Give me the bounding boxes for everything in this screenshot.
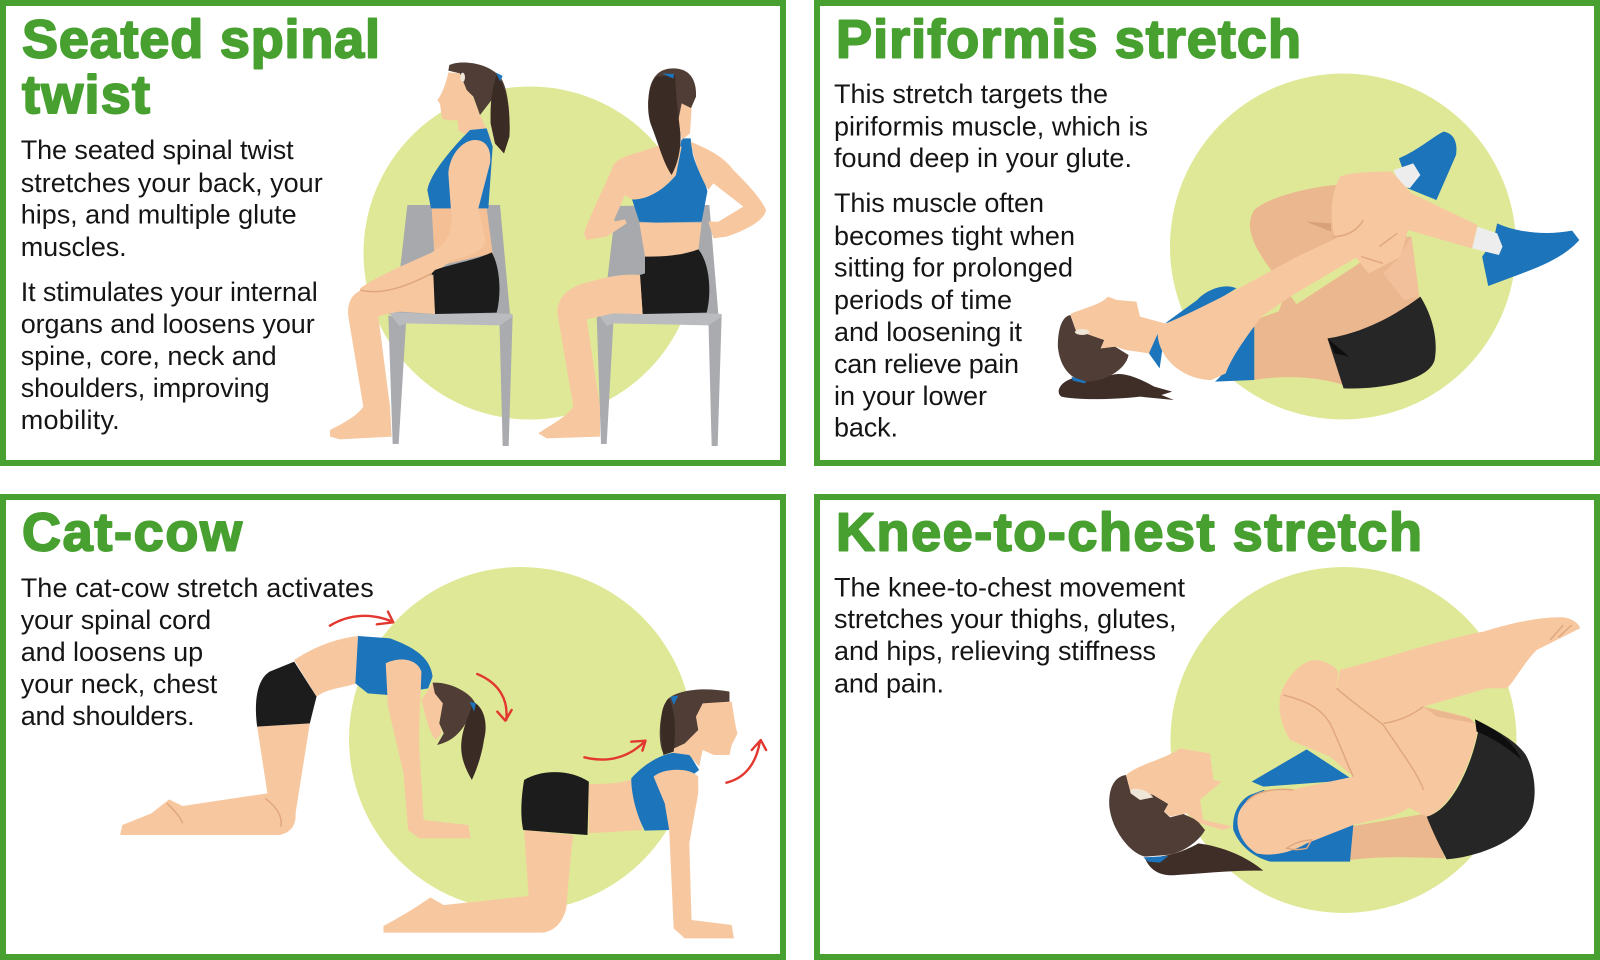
panel: cat-cow xyxy=(3,497,783,957)
text block: piriformis description: and loosening it xyxy=(834,317,1022,347)
text block: piriformis description: in your lower xyxy=(834,381,987,411)
text block: piriformis description: sitting for prolonged xyxy=(834,252,1073,282)
text block: piriformis description: periods of time xyxy=(834,285,1012,315)
panel: knee-to-chest stretch xyxy=(817,497,1597,957)
text block: piriformis description: can relieve pain xyxy=(834,349,1019,379)
text block: seated spinal twist description: It stimulates your internal xyxy=(21,277,318,307)
arrow: cat head xyxy=(477,674,512,721)
icon: background circle xyxy=(1170,567,1516,913)
text block: piriformis description: found deep in your glute. xyxy=(834,143,1132,173)
arrow: cat back xyxy=(330,612,393,626)
text block: seated spinal twist description: spine, core, neck and xyxy=(21,341,277,371)
text block: knee-to-chest description: stretches your thighs, glutes, xyxy=(834,604,1176,634)
heading: cat-cow: Cat-cow xyxy=(22,503,243,563)
illustration: woman seated back view twisting on chair xyxy=(538,68,766,446)
arrow: cow head xyxy=(726,740,766,783)
text block: knee-to-chest description xyxy=(834,573,1185,699)
text block: piriformis description: becomes tight when xyxy=(834,221,1075,251)
text block: seated spinal twist description: The seated spinal twist xyxy=(21,135,294,165)
text block: cat-cow description: and loosens up xyxy=(21,637,203,667)
panel: seated spinal twist xyxy=(3,3,783,463)
illustration: woman in cat pose xyxy=(120,636,486,838)
text block: piriformis description: back. xyxy=(834,412,898,442)
text block: seated spinal twist description: muscles. xyxy=(21,232,127,262)
text block: knee-to-chest description: The knee-to-chest movement xyxy=(834,573,1185,603)
icon: background circle xyxy=(349,567,693,911)
text block: seated spinal twist description: mobility. xyxy=(21,405,120,435)
text block: seated spinal twist description: stretches your back, your xyxy=(21,168,323,198)
panel: piriformis stretch xyxy=(817,3,1597,463)
text block: piriformis description: This stretch targets the xyxy=(834,79,1108,109)
illustration: woman seated side view on chair xyxy=(330,62,513,446)
heading: seated spinal twist: twist xyxy=(22,65,150,125)
text block: knee-to-chest description: and pain. xyxy=(834,669,944,699)
text block: seated spinal twist description: shoulders, improving xyxy=(21,373,270,403)
text block: piriformis description xyxy=(834,79,1148,442)
text block: seated spinal twist description: organs and loosens your xyxy=(21,309,315,339)
heading: seated spinal twist xyxy=(22,10,380,125)
illustration: woman in cow pose xyxy=(383,689,738,938)
heading: knee-to-chest stretch: Knee-to-chest stretch xyxy=(836,503,1422,563)
heading: piriformis stretch: Piriformis stretch xyxy=(836,10,1301,70)
text block: cat-cow description: your spinal cord xyxy=(21,605,211,635)
text block: seated spinal twist description: hips, and multiple glute xyxy=(21,200,297,230)
illustration: woman lying piriformis stretch xyxy=(1058,132,1579,400)
icon: background circle xyxy=(364,86,696,420)
text block: seated spinal twist description xyxy=(21,135,323,435)
arrow: cow back xyxy=(584,741,646,760)
icon: background circle xyxy=(1170,74,1516,420)
text block: piriformis description: piriformis muscle, which is xyxy=(834,112,1148,142)
text block: piriformis description: This muscle often xyxy=(834,188,1044,218)
illustration: woman lying knee-to-chest xyxy=(1109,617,1580,875)
text block: knee-to-chest description: and hips, relieving stiffness xyxy=(834,636,1156,666)
text block: cat-cow description: The cat-cow stretch activates xyxy=(21,573,374,603)
text block: cat-cow description: your neck, chest xyxy=(21,669,218,699)
text block: cat-cow description xyxy=(21,573,374,731)
heading: seated spinal twist: Seated spinal xyxy=(22,10,380,70)
text block: cat-cow description: and shoulders. xyxy=(21,701,195,731)
